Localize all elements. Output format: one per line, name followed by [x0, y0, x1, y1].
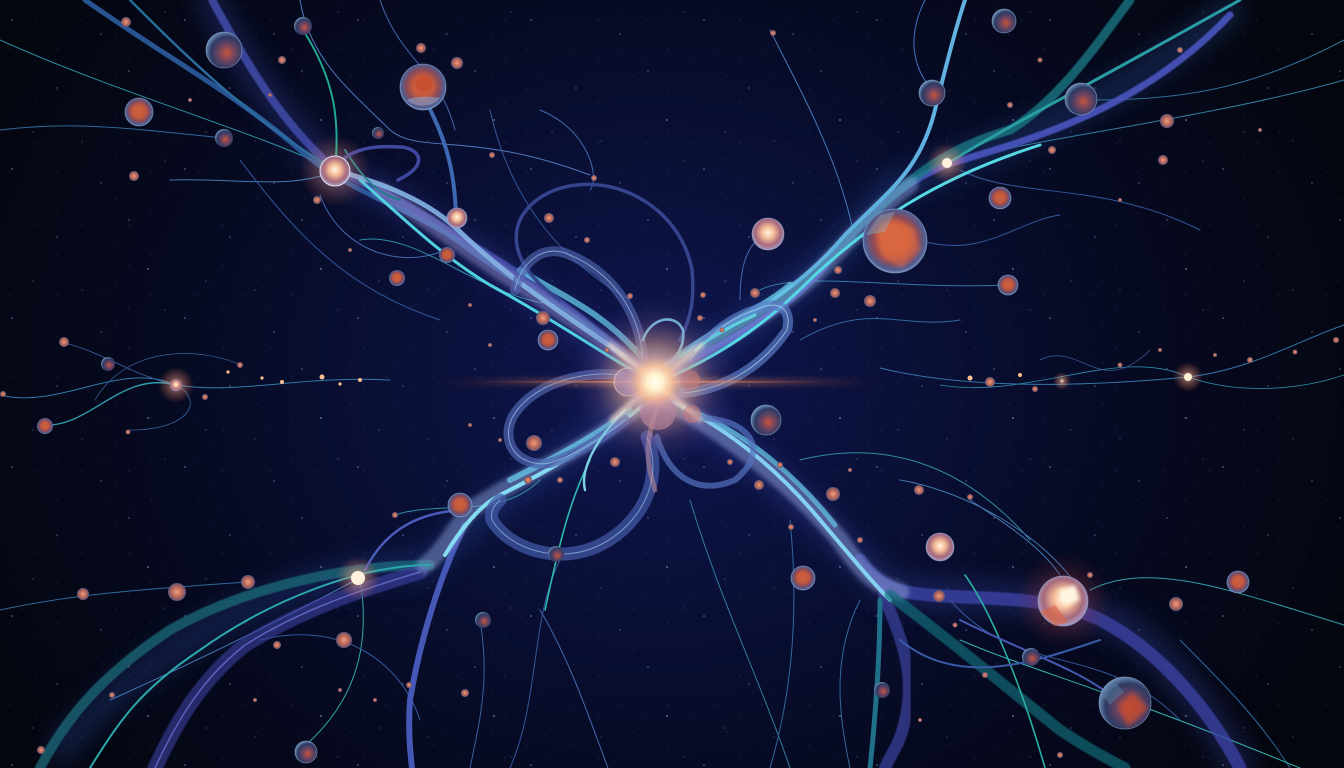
- branch: upper left: [85, 0, 650, 375]
- horizontal light flare: [440, 379, 880, 385]
- orb: upper left crystal: [400, 64, 446, 110]
- loops around the core: [492, 184, 788, 554]
- orb: upper right crystal: [863, 209, 927, 273]
- core burst: [570, 297, 740, 467]
- orb: bright lower right crystal: [1015, 553, 1111, 649]
- branch: lower left: [40, 395, 650, 768]
- right horizontal constellation: [880, 325, 1344, 392]
- orb: dark faceted crystal: [1099, 677, 1151, 729]
- glowing junction nodes: [299, 135, 967, 600]
- branch: upper right: [660, 0, 1240, 376]
- left horizontal constellation: [0, 337, 390, 434]
- branch: lower right: [665, 398, 1240, 768]
